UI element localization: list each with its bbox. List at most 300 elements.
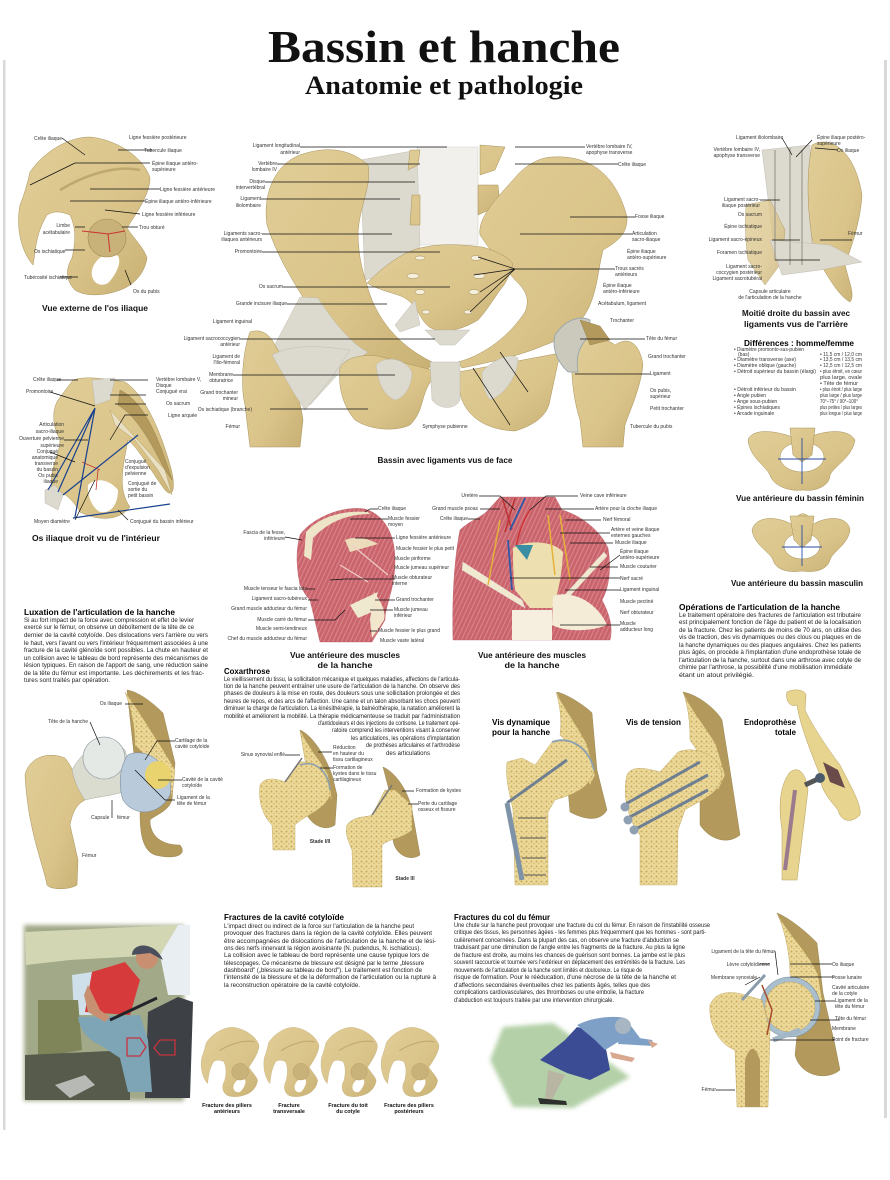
labels: Membrane [832,1026,856,1032]
labels: fémur [117,815,130,821]
labels: Ligne arquée [168,413,197,419]
labels: Crête iliaque [33,377,61,383]
text block: coxarthrose [224,666,460,757]
labels: Ligne fessière inférieure [142,212,196,218]
steering wheel [110,998,157,1020]
labels: Muscle fessier le plus petit [396,546,455,552]
panel: four fracture types [201,1027,439,1115]
caption: de la hanche [318,661,373,670]
caption: de la hanche [504,661,560,670]
cabin ceiling [25,925,178,965]
labels: Artère et veine iliaque [611,527,660,533]
body: dashboard" („blessure au tableau de bord"). Le traitement est fonction de [224,967,422,974]
illustration: iliopsoas muscles [453,497,611,640]
illustration: truck driver scene [24,925,193,1101]
red arrows [127,1038,146,1056]
body: Le vieillissement du tissu, la sollicitation mécanique et quelques maladies, affections de l'articula- [224,676,460,683]
body: L'impact direct ou indirect de la force sur l'articulation de la hanche peut [224,923,414,930]
labels: Épine iliaque [620,548,649,555]
table: • 13,5 cm / 13,5 cm [820,357,862,363]
labels: Ligament sacro- [724,197,760,203]
labels: iliaque [44,479,58,485]
labels: tête de fémur [177,801,207,807]
vertebrae bits [408,145,505,225]
left hip ligament [272,297,368,405]
body: dernier de la cavité cotyloïde. Des dislocations vers l'arrière ou vers [24,632,208,639]
man jeans [78,1015,152,1092]
labels: Muscle carré du fémur [257,617,307,623]
body: Si au fort impact de la force avec compression et effet de levier [24,617,194,624]
illustration: inner hip bone [45,378,173,518]
labels: Uretère [461,493,478,499]
table: • Angle pubien [734,393,766,399]
labels: Grand muscle psoas [432,506,478,512]
labels: Promontoire [26,389,53,395]
body: plus âgés, on procède à l'implantation d'une endoprothèse totale de [679,649,861,656]
illustration: coxarthrosis stage III: Formation de kystes [416,788,462,794]
labels: Vertèbre lombaire IV, [713,147,760,153]
leader lines [30,138,160,285]
body: des articulations [386,750,430,757]
body: heures de repos, et des arcs de l'affection. Une canne et un talon absorbant les chocs peuvent [224,698,460,705]
arm [84,985,110,1022]
labels: Ligament inguinal [213,319,252,325]
body: de la tête du fémur est importante. Les déchirements et les frac- [24,670,204,677]
leader lines [716,951,840,1090]
labels: Crête iliaque [378,506,406,512]
captions: du cotyle [336,1109,360,1115]
caption [478,651,587,670]
panel: right half of pelvis, back view [709,134,866,329]
labels: antérieur [280,150,300,156]
body: l'intensité de la blessure et de la déformation de l'articulation ou la rupture à [224,974,437,981]
arm [618,1035,654,1046]
illustration: male pelvis [752,514,850,572]
illustration: coxarthrosis stage III: osseux et fissure [418,807,456,813]
table: plus large / plus large [820,393,862,399]
spine: white anterior longitudinal ligament [417,147,478,245]
caption [290,651,401,670]
caption: Bassin avec ligaments vus de face [378,456,513,465]
labels: Promontoire [235,249,262,255]
labels: Conjugué [37,449,58,455]
femur [25,755,85,889]
illustration: endoprosthesis [780,690,860,880]
body: lésion typiques. En raison de l'apport de sang, une réduction saine [24,662,208,669]
labels: Veine cave inférieure [580,493,627,499]
femoral head [83,737,125,779]
body: phases de douleurs à la mise en route, des douleurs sous une sollicitation prolongée et des [224,690,460,697]
caption: Vue antérieure des muscles [290,651,401,660]
labels: Cavité de la cavité [182,777,223,783]
body: mobilité et améliorent la mobilité. La thérapie médicamenteuse se traduit par l'administration [224,713,460,720]
body: d'antidouleurs et des injections de cortisone. Le traitement opé- [318,720,460,727]
illustration: hip joint section [25,690,223,889]
body: tures sont traités par opération. [24,677,110,684]
head [615,1018,631,1034]
captions: Fracture des piliers [384,1103,434,1109]
labels: Tubérosité ischiatique [24,275,73,281]
illustration: dynamic screw [507,692,607,885]
labels: Grand muscle adducteur du fémur [231,606,307,612]
labels: supérieur [650,394,671,400]
table: • Épines ischiatiques [734,404,780,411]
table: • Diamètre promonto-sus-pubien [734,347,804,353]
labels [228,506,455,644]
labels: Os iliaque [832,962,854,968]
labels: Fascia de la fesse, [243,530,285,536]
illustration: coxarthrosis stage I/II: en hauteur du [333,751,364,757]
body: étant un atout privilégié. [679,672,754,679]
labels: inférieure [264,536,285,542]
labels: Cavité articulaire [832,985,869,991]
labels: Capsule [91,815,110,821]
table: • plus étroit / plus large [820,387,862,393]
body: de fracture est droite, au moins les chances de guérison sont bonnes. La jambe est le plus [454,952,685,959]
labels: supérieure [152,167,176,173]
labels: Vertèbre lombaire V, [156,377,201,383]
body: télescopages. Ce mécanisme de blessure est désigné par le terme „blessure [224,960,424,967]
labels: Ligament sacro-épineux [709,237,762,243]
labels: Foramen ischiatique [717,250,762,256]
body: fracture de la cavité glénoïde sont possibles. La chute en hauteur et [24,647,208,654]
body: exercé sur le fémur, on observe un déboîtement de la tête de ce [24,624,194,631]
acetabulum [120,753,171,812]
labels: Muscle piriforme [394,556,431,562]
labels: petit bassin [128,493,154,499]
table: • 11,5 cm / 12,0 cm [820,352,862,358]
labels: coccygien postérieur [716,270,762,276]
panel: central pelvis with ligaments, front view [184,143,686,465]
labels: Muscle fessier [388,516,420,522]
illustration: coxarthrosis stage III: Stade III [395,876,415,882]
head [136,947,158,969]
table: • Tête de fémur [820,381,858,387]
top right corner [160,925,190,995]
labels: Muscle pectiné [620,599,654,605]
captions: antérieurs [214,1109,240,1115]
body: La collision avec le tableau de bord représente une cause typique lors de [224,952,429,959]
table: plus petites / plus larges [820,405,862,411]
table: • Détroit supérieur du bassin (élargi) [734,369,816,375]
illustration: coxarthrosis stage I/II: Sinus synovial enflé [241,752,285,758]
labels: Vertèbre [258,161,277,167]
body: d'affections secondaires éventuelles chez les patients âgés, telles que des [454,982,650,989]
labels: Muscle iliaque [615,540,647,546]
labels: Os sacrum [738,212,762,218]
labels: Capsule articulaire [749,289,791,295]
labels: Grand trochanter [648,354,686,360]
labels: iliaque postérieur [722,203,760,209]
labels: Muscle vaste latéral [380,638,424,644]
labels: supérieure [40,443,64,449]
illustration: tension screws [620,692,740,885]
illustration: coxarthrosis stage I/II: cartilagineux [333,777,362,783]
labels [48,701,223,859]
illustration: pelvis front [243,145,643,447]
heading: totale [775,727,796,737]
labels: Épine iliaque [627,248,656,255]
illustration: pelvis back [745,142,862,302]
table: • 12,5 cm / 12,5 cm [820,363,862,369]
labels: Limbe [56,223,70,229]
body: mouvements de l'articulation de la hanche sont limités et douloureux. Le risque de [454,967,642,974]
heading: Coxarthrose [224,666,270,676]
labels: Crête iliaque [618,162,646,168]
table: • Détroit inférieur du bassin [734,387,796,393]
labels: sacro-iliaque [36,429,64,435]
dashboard [145,997,193,1098]
caption: ligaments vus de l'arrière [744,320,849,329]
labels: Os iliaque [100,701,122,707]
labels [432,493,660,633]
panel: total prosthesis [744,690,860,880]
fat pad [145,761,171,789]
labels: transverse [35,461,58,467]
labels: Ligament sacrococcygien [184,336,240,342]
body: de la fracture. Chez les patients de moins de 70 ans, on utilise des [679,627,861,634]
capsule [72,743,135,800]
labels: Chef du muscle adducteur du fémur [228,636,307,642]
labels: antéro-supérieure [620,555,660,561]
caption: Vue antérieure du bassin féminin [736,494,864,503]
body [24,617,208,684]
illustration: coxarthrosis stage I/II: kystes dans le tissu [333,771,377,777]
labels: iliolombaire [236,203,261,209]
illustration: female pelvis [748,428,855,490]
caption: Os iliaque droit vu de l'intérieur [32,534,160,543]
text block: luxation [24,607,208,684]
jacket [577,1017,640,1050]
labels: apophyse transverse [586,150,633,156]
labels: Symphyse pubienne [422,424,468,430]
labels: lombaire IV [252,167,278,173]
panel: male female differences [734,338,862,417]
rug [490,1023,630,1108]
labels: Fémur [848,231,863,237]
labels: Ligament sacro-tubéreux [252,596,307,602]
right ischium pubis [458,353,560,431]
labels: Ligament [650,371,671,377]
labels: Muscle fessier le plus grand [378,628,440,634]
labels: moyen [388,522,403,528]
labels: externes gauches [611,533,651,539]
labels: Ligament iliolombaire [736,135,783,141]
caption: Moitié droite du bassin avec [742,309,851,318]
labels [702,949,869,1093]
panel: muscles anterior right [432,493,660,670]
hands [610,1040,658,1062]
labels: Muscle tenseur le fascia lata [244,586,307,592]
leg [545,1070,565,1100]
text block: operations [679,602,861,679]
labels: Lèvre cotyloïdienne [727,962,770,968]
labels: Conjugué du bassin inférieur [130,519,194,525]
caption: Vue antérieure des muscles [478,651,587,660]
labels: Tête du fémur [835,1016,866,1022]
labels: Crête iliaque [34,136,62,142]
body: l'articulation de la hanche, surtout dans une arthrose avec cotyle de [679,657,861,664]
labels: Ligament de la [177,795,210,801]
body: Une chute sur la hanche peut provoquer une fracture du col du fémur. En raison de l'instabilité osseuse [454,922,710,929]
labels: Muscle [620,621,636,627]
captions: Fracture [278,1103,300,1109]
labels: d'expulsion [125,465,150,471]
labels: Épine ischiatique [724,223,762,230]
shoe [538,1098,567,1105]
body: ons des nerfs innervant la région avoisinante (N. pudendus, N. ischiaticus). [224,945,421,952]
labels: interne [392,581,408,587]
captions: transversale [273,1109,305,1115]
labels: Muscle jumeau supérieur [394,565,449,571]
body: critique des tissus, les personnes âgées - les femmes plus fréquemment que les hommes - sont parti- [454,929,706,936]
labels: cotyloïde [182,783,202,789]
seat [38,1000,82,1058]
captions: Fracture du toit [328,1103,368,1109]
labels: Ligament de [212,354,240,360]
labels: Ligament de la [835,998,868,1004]
labels: Os sacrum [166,401,190,407]
caption: Vue antérieure du bassin masculin [731,579,863,588]
leader lines [90,704,182,818]
right femur [572,338,643,447]
labels [184,143,686,430]
labels: Grand trochanter [396,597,434,603]
heading: Opérations de l'articulation de la hanche [679,602,840,612]
pubic symphysis [430,362,460,408]
labels: Conjugué vrai [156,389,187,395]
labels: Disque [156,383,172,389]
sacrum [367,245,513,331]
labels: Ligament de la tête du fémur [711,949,775,955]
illustration: hip bone external [19,137,150,295]
window [72,972,92,1015]
illustration: coxarthrosis stage I/II: Formation de [333,765,363,771]
labels: antéro-supérieure [627,255,667,261]
labels: l'ilio-fémoral [213,360,240,366]
heading: pour la hanche [492,727,550,737]
labels: Petit trochanter [650,406,684,412]
body [679,612,861,679]
illustration: coxarthrosis stage I/II: Réduction [333,745,356,751]
heading: Vis de tension [626,717,681,727]
labels: Ligne fessière postérieure [129,135,187,141]
labels: antérieur [220,342,240,348]
body: la reconstruction opératoire de la cavité cotyloïde. [224,982,360,989]
table: plus longue / plus large [820,411,862,417]
labels: Muscle couturier [620,564,657,570]
heading [744,717,796,737]
left ilium [266,150,432,371]
labels: mineur [223,396,238,402]
labels: Ligament longitudinal [253,143,300,149]
labels: Vertèbre lombaire IV, [586,144,633,150]
illustration: anterior column fracture [201,1027,259,1097]
heading: Luxation de l'articulation de la hanche [24,607,175,617]
illustration: coxarthrosis stage I/II: Stade I/II [310,839,331,845]
labels [709,134,866,301]
body: Le traitement opératoire des fractures de l'articulation est tributaire [679,612,861,619]
body [454,922,710,1004]
panel: femoral neck fracture section [702,913,869,1107]
labels: adducteur long [620,627,653,633]
dress [540,1027,610,1080]
panel: dynamic hip screw [492,692,607,885]
labels: Fosse lunaire [832,975,862,981]
body: culièrement concernées. Dans la plupart des cas, on observe une fracture d'abduction se [454,937,679,944]
labels [24,135,215,295]
labels: Trous sacrés [615,266,644,272]
labels: cavité cotyloïde [175,744,210,750]
labels: de l'articulation de la hanche [738,295,802,301]
labels: Conjugué [125,459,147,465]
illustration: fallen woman on rug [490,1017,658,1108]
labels: Ouverture pelvienne [19,436,64,442]
illustration: transverse fracture [264,1027,319,1097]
labels: Muscle jumeau [394,607,428,613]
labels: inférieur [394,613,412,619]
illustration: coxarthrosis stage III: Perte du cartilage [418,801,457,807]
heading: Fractures de la cavité cotyloïde [224,912,344,922]
illustration: coxarthrosis stage I/II: tissu cartilagineux [333,757,373,763]
labels: Os ischiatique [34,249,66,255]
labels: Épine iliaque [603,282,632,289]
labels: Trochanter [610,318,634,324]
leader lines [50,380,148,520]
labels: Disque [249,179,265,185]
body: risque de formation. Pour le rééducation, d'une nécrose de la tête de la hanche et [454,974,676,981]
title: Bassin et hanche [268,21,620,72]
panel: tension screws [620,692,740,885]
illustration: coxarthrosis stage I/II [241,730,377,850]
labels: obturatrice [209,378,233,384]
labels: Os pubis [38,473,58,479]
table: • Diamètre oblique (gauche) [734,363,796,369]
man shirt [85,962,140,1015]
labels: Nerf sacré [620,576,643,582]
labels: Os pubis, [650,388,671,394]
leader lines [233,147,650,425]
body: la hanche dynamiques ou des plaques angulaires. Chez les patients [679,642,861,649]
labels: Os iliaque [837,148,859,154]
body: provoquer des fractures dans la région de la cavité cotyloïde. Elles peuvent [224,930,432,937]
labels: Épine iliaque postéro- [817,134,866,141]
labels: antéro-inférieure [603,289,640,295]
labels: Os ischiatique (branche) [198,407,252,413]
cap [132,945,163,960]
labels: apophyse transverse [714,153,760,159]
labels: Ligament inguinal [620,587,659,593]
labels: Point de fracture [832,1037,869,1043]
heading [492,717,550,737]
illustration: gluteal muscles [297,508,395,642]
body: ratoire comprend les interventions visant à conserver [332,727,460,734]
labels: pelvienne [125,471,147,477]
labels: Nerf obturateur [620,610,654,616]
labels: Membrane synoviale [711,975,757,981]
illustration: posterior column fracture [381,1027,439,1097]
table: • plus étroit, en cœur [820,369,862,375]
left femur [243,331,303,447]
labels: Fémur [702,1087,716,1093]
labels: Tubercule iliaque [144,148,182,154]
labels: antérieurs [615,272,638,278]
labels: iliaques antérieurs [221,237,262,243]
left ischium pubis [340,356,432,429]
captions: postérieurs [394,1109,424,1115]
body: un collision avec le tableau de bord représente des mécanismes de [24,655,208,662]
table: (bas) [738,352,750,358]
